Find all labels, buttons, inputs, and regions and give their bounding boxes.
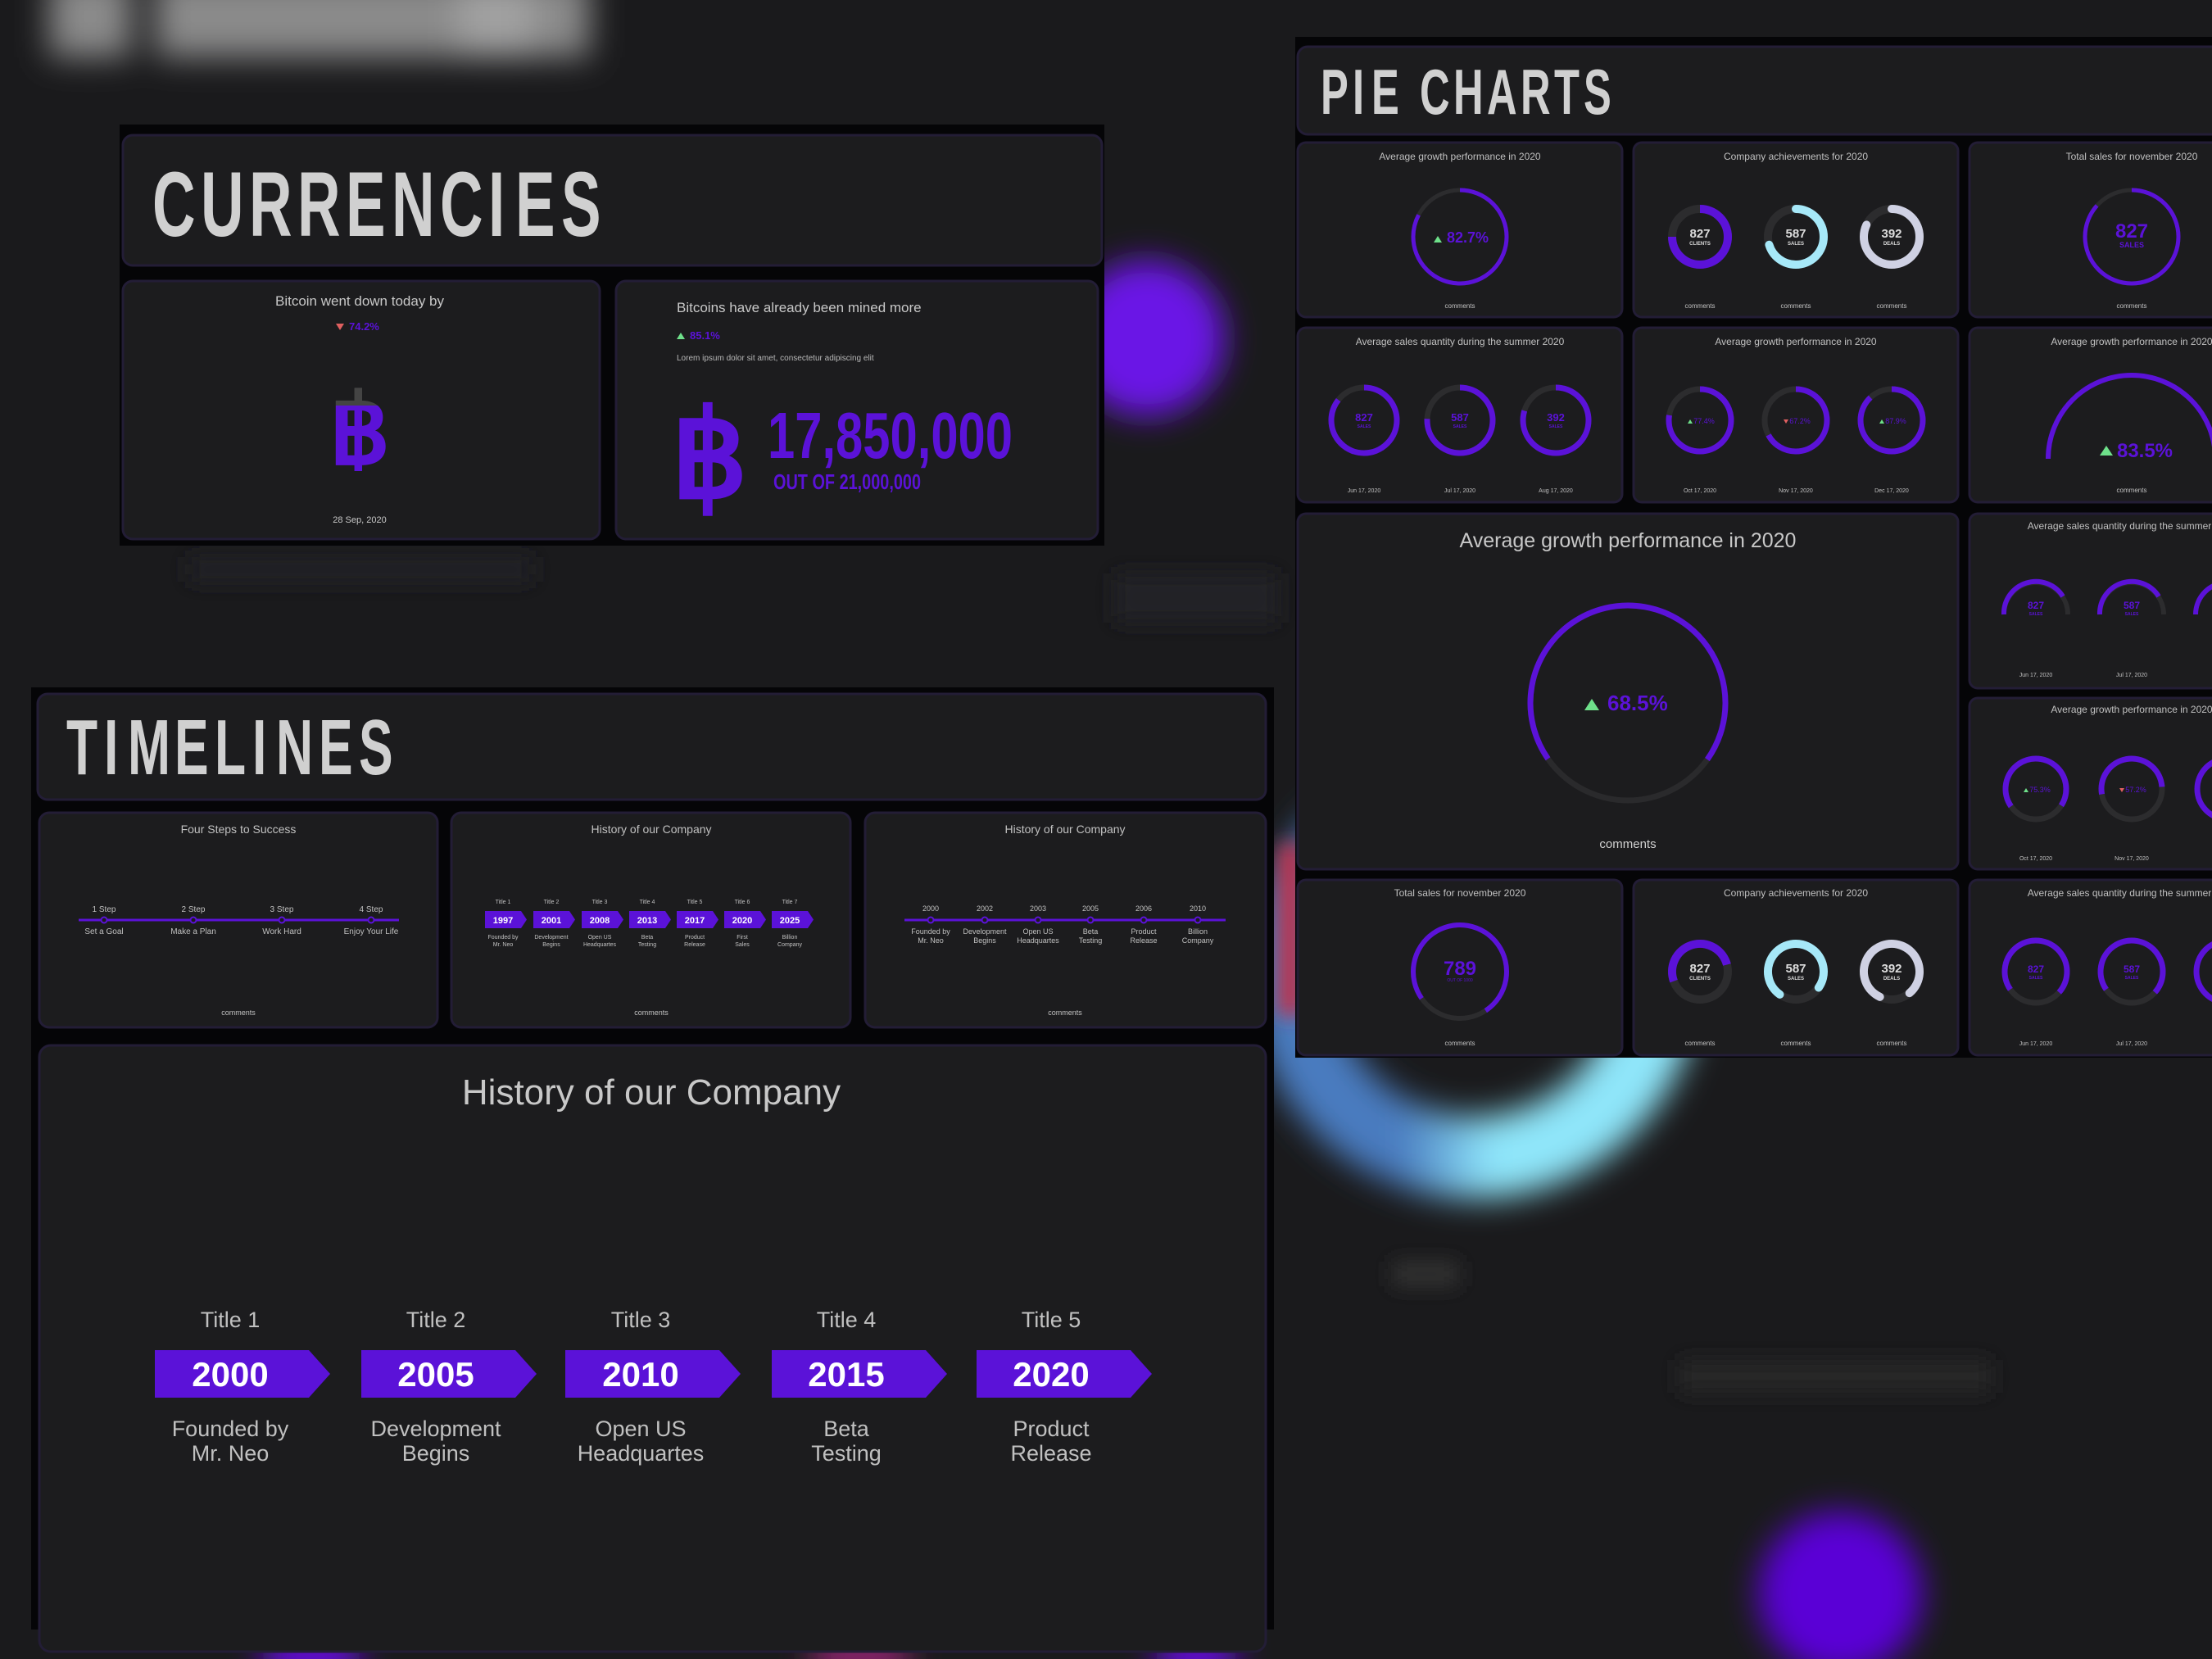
card: history chevrons: History of our Company [591, 823, 712, 836]
card: four steps: Set a Goal [84, 927, 124, 936]
chart: growth three [1669, 336, 1923, 494]
card: bitcoin went down: Bitcoin went down today by [275, 293, 445, 309]
step 1: Founded by [172, 1416, 289, 1441]
chart: big growth 68.5: Average growth performance in 2020 [1460, 529, 1796, 552]
step 2: Title 2 [406, 1308, 465, 1332]
card: history chevrons: Begins [542, 942, 560, 948]
chart: summer sales [1331, 336, 1589, 494]
step 4: 2015 [808, 1355, 885, 1394]
card: bitcoin went down: 28 Sep, 2020 [333, 515, 387, 525]
card: history chevrons: comments [634, 1009, 669, 1017]
chart: company achievements: 392 [1881, 227, 1902, 241]
chart: company achievements: CLIENTS [1689, 242, 1711, 247]
chart: growth three: Oct 17, 2020 [1684, 488, 1716, 494]
chart: summer sales bottom right: Jul 17, 2020 [2116, 1041, 2147, 1047]
chart: summer sales: Average sales quantity during the summer 2020 [1356, 336, 1565, 347]
chart: summer sales: Aug 17, 2020 [1539, 488, 1573, 494]
card: history chevrons: Development [534, 935, 569, 941]
big number: 17,850,000 [768, 399, 1013, 472]
card: bitcoins mined: Bitcoins have already been mined more [677, 300, 922, 315]
card: bitcoins mined: OUT OF 21,000,000 [773, 469, 921, 494]
step 4: Testing [811, 1441, 882, 1466]
chart: summer sales bottom right [1992, 887, 2212, 1047]
card: history line: Beta [1083, 927, 1098, 936]
step 1: 2000 [192, 1355, 269, 1394]
icon: bitcoin partial: ฿ [329, 377, 391, 485]
heading: currencies [123, 135, 1102, 265]
card: history chevrons: Beta [641, 935, 653, 941]
card: history line: 2010 [1190, 904, 1206, 913]
card: history chevrons: 2020 [732, 916, 752, 926]
step 5: Product [1013, 1416, 1090, 1441]
icon: bitcoin partial: ฿ [329, 377, 391, 485]
chart: avg growth 82.7: 82.7% [1447, 229, 1489, 246]
chart: gauge 83.5: Average growth performance in 2020 [2051, 336, 2212, 347]
card: history line: Testing [1079, 936, 1102, 945]
step 4: Beta [823, 1416, 870, 1441]
step 1: Mr. Neo [192, 1441, 269, 1466]
chart: gauge 83.5: comments [2117, 487, 2146, 494]
chart: total sales 789: OUT OF 1000 [1447, 978, 1473, 983]
chart: growth three: Average growth performance in 2020 [1715, 336, 1877, 347]
chart: total sales 827: SALES [2119, 241, 2144, 249]
chart: company achievements gauges: 392 [1881, 962, 1902, 976]
step 2: 2005 [397, 1355, 474, 1394]
card: history chevrons: Mr. Neo [493, 942, 513, 948]
card: four steps: Enjoy Your Life [344, 927, 399, 936]
chart: growth right: 57.2% [2125, 786, 2146, 794]
chart: company achievements: comments [1877, 302, 1906, 310]
chart: summer sales bottom right: 587 [2124, 963, 2140, 975]
card: history chevrons: Title 4 [640, 900, 655, 905]
chart: summer sales: SALES [1453, 424, 1467, 429]
chart: growth right: 75.3% [2029, 786, 2051, 794]
card: history chevrons: 2025 [780, 916, 800, 926]
step 3 [565, 1308, 741, 1466]
card: four steps [39, 813, 437, 1027]
chart: summer sales: SALES [1358, 424, 1371, 429]
chart: summer sales: 827 [1355, 411, 1373, 424]
card: big history timeline [39, 1045, 1266, 1652]
panel: pie charts [1295, 37, 2212, 1058]
card: history chevrons: 2017 [685, 916, 705, 926]
card: history chevrons: Title 7 [782, 900, 798, 905]
card: history line: 2005 [1082, 904, 1099, 913]
card: four steps: Four Steps to Success [181, 823, 296, 836]
step 3: Headquartes [578, 1441, 704, 1466]
card: history chevrons: 2013 [637, 916, 657, 926]
indicator up [677, 329, 720, 342]
chart: growth three: 77.4% [1693, 417, 1715, 425]
step 5 [977, 1308, 1152, 1466]
panel: currencies [120, 125, 1104, 546]
chart: total sales 789 [1394, 887, 1526, 1047]
heading: pie charts: PIECHARTS [1321, 56, 1611, 128]
step 5: 2020 [1013, 1355, 1090, 1394]
card: history line: History of our Company [1004, 823, 1126, 836]
card: history chevrons: First [737, 935, 748, 941]
card: history line: Product [1131, 927, 1157, 936]
card: history chevrons: Founded by [488, 935, 519, 941]
card: history line: Open US [1022, 927, 1054, 936]
indicator down: 74.2% [349, 320, 379, 333]
chart: growth three: 67.2% [1789, 417, 1811, 425]
chart: growth right [1993, 704, 2212, 862]
chart: company achievements: comments [1685, 302, 1715, 310]
step 5: Title 5 [1022, 1308, 1081, 1332]
card: history chevrons: Release [684, 942, 705, 948]
chart: company achievements: Company achievements for 2020 [1724, 151, 1868, 162]
chart: total sales 827: 827 [2115, 220, 2148, 243]
card: history line: Development [963, 927, 1007, 936]
chart: summer sales: Jun 17, 2020 [1348, 488, 1380, 494]
chart: summer sales bottom right: SALES [2125, 976, 2139, 981]
step 2 [361, 1308, 537, 1466]
card: history line: Mr. Neo [918, 936, 944, 945]
step 3: Open US [595, 1416, 687, 1441]
chart: company achievements gauges: SALES [1788, 977, 1804, 981]
chart: company achievements gauges: 587 [1785, 962, 1806, 976]
step 5: Release [1010, 1441, 1092, 1466]
chart: avg growth 82.7: Average growth performance in 2020 [1379, 151, 1541, 162]
card: history chevrons [451, 813, 850, 1027]
chart: company achievements gauges: comments [1685, 1040, 1715, 1047]
card: history line: Founded by [911, 927, 950, 936]
card: history line: 2003 [1030, 904, 1046, 913]
card: four steps: 2 Step [182, 905, 206, 914]
indicator up: 85.1% [690, 329, 720, 342]
icon: bitcoin partial [336, 388, 386, 471]
card: bitcoin went down [123, 281, 600, 539]
chart: company achievements gauges: DEALS [1883, 977, 1900, 981]
chart: summer half rings: Jun 17, 2020 [2019, 673, 2052, 678]
heading: currencies: CURRENCIES [152, 153, 601, 256]
chart: big growth 68.5: 68.5% [1607, 691, 1668, 715]
step 1: Title 1 [201, 1308, 260, 1332]
chart: summer half rings [2004, 520, 2212, 678]
card: history line: Company [1182, 936, 1214, 945]
card: history chevrons: 1997 [493, 916, 513, 926]
card: four steps: 3 Step [270, 905, 294, 914]
card: history chevrons: Title 5 [687, 900, 703, 905]
chart: summer sales bottom right: SALES [2029, 976, 2043, 981]
chart: growth right: Average growth performance in 2020 [2051, 704, 2212, 715]
chart: summer sales bottom right: Jun 17, 2020 [2019, 1041, 2052, 1047]
chart: growth right: Nov 17, 2020 [2115, 856, 2149, 862]
chart: summer half rings: 587 [2124, 600, 2140, 611]
heading: timelines: TIMELINES [66, 705, 393, 791]
card: four steps: comments [221, 1009, 256, 1017]
card: history line: comments [1048, 1009, 1082, 1017]
chart: summer half rings: 827 [2028, 600, 2044, 611]
chart: company achievements: DEALS [1883, 242, 1900, 247]
card: history chevrons: Open US [588, 935, 612, 941]
step 4: Title 4 [817, 1308, 876, 1332]
card: history chevrons: 2008 [590, 916, 610, 926]
card: four steps: 1 Step [93, 905, 116, 914]
chart: growth right: Oct 17, 2020 [2019, 856, 2052, 862]
chart: company achievements: SALES [1788, 242, 1804, 247]
card: history line: 2000 [922, 904, 939, 913]
heading: pie charts [1298, 47, 2212, 134]
chart: avg growth 82.7: comments [1445, 302, 1475, 310]
panel: timelines [31, 687, 1274, 1652]
chart: big growth 68.5: comments [1599, 837, 1657, 851]
card: bitcoins mined: Lorem ipsum dolor sit amet, consectetur adipiscing elit [677, 354, 874, 363]
chart: gauge 83.5 [2048, 336, 2212, 494]
card: four steps: 4 Step [360, 905, 383, 914]
chart: big growth 68.5 [1460, 529, 1796, 851]
card: history chevrons: 2001 [542, 916, 561, 926]
chart: avg growth 82.7 [1379, 151, 1541, 310]
chart: gauge 83.5: 83.5% [2117, 440, 2173, 462]
chart: total sales 789: 789 [1444, 958, 1476, 980]
chart: summer sales: SALES [1549, 424, 1563, 429]
card: history chevrons: Title 6 [735, 900, 750, 905]
card: history chevrons: Headquartes [583, 942, 617, 948]
chart: summer half rings: Jul 17, 2020 [2116, 673, 2147, 678]
card: bitcoins mined [616, 281, 1098, 539]
card: history line: Begins [973, 936, 996, 945]
step 1 [155, 1308, 330, 1466]
step 2: Begins [402, 1441, 469, 1466]
heading: timelines [38, 694, 1266, 800]
chart: growth three: 87.9% [1885, 417, 1906, 425]
card: history line: Headquartes [1017, 936, 1059, 945]
card: history line [865, 813, 1266, 1027]
card: history chevrons: Title 3 [592, 900, 608, 905]
card: history chevrons: Sales [735, 942, 750, 948]
chart: total sales 789: comments [1445, 1040, 1475, 1047]
step 3: Title 3 [611, 1308, 670, 1332]
chart: total sales 827 [2066, 151, 2198, 310]
card: history chevrons: Product [685, 935, 705, 941]
indicator down [336, 320, 379, 333]
chart: company achievements gauges: comments [1877, 1040, 1906, 1047]
chart: summer sales bottom right: 827 [2028, 963, 2044, 975]
card: history chevrons: Title 1 [496, 900, 511, 905]
chart: summer half rings: SALES [2029, 612, 2043, 617]
card: history line: Billion [1188, 927, 1208, 936]
card: history chevrons: Billion [782, 935, 797, 941]
chart: company achievements [1672, 151, 1920, 310]
chart: company achievements: 827 [1689, 227, 1711, 241]
chart: summer sales: 587 [1451, 411, 1469, 424]
card: history chevrons: Testing [638, 942, 656, 948]
chart: summer sales: 392 [1547, 411, 1565, 424]
chart: total sales 827: Total sales for november 2020 [2066, 151, 2198, 162]
chart: summer half rings: SALES [2125, 612, 2139, 617]
chart: company achievements: comments [1781, 302, 1811, 310]
card: history chevrons: Company [777, 942, 802, 948]
chart: total sales 827: comments [2117, 302, 2146, 310]
card: history chevrons: Title 2 [544, 900, 560, 905]
chart: growth three: Nov 17, 2020 [1779, 488, 1813, 494]
step 3: 2010 [602, 1355, 679, 1394]
chart: company achievements gauges: CLIENTS [1689, 977, 1711, 981]
chart: company achievements gauges: comments [1781, 1040, 1811, 1047]
chart: company achievements: 587 [1785, 227, 1806, 241]
card: four steps: Make a Plan [170, 927, 216, 936]
chart: growth three: Dec 17, 2020 [1874, 488, 1909, 494]
chart: company achievements gauges: Company achievements for 2020 [1724, 887, 1868, 899]
card: history line: 2002 [977, 904, 993, 913]
chart: summer sales: Jul 17, 2020 [1444, 488, 1475, 494]
card: history line: 2006 [1135, 904, 1152, 913]
card: big history timeline: History of our Company [462, 1072, 841, 1113]
icon: bitcoin: ฿ [671, 388, 748, 524]
chart: company achievements gauges [1664, 887, 1929, 1047]
step 4 [772, 1308, 947, 1466]
step 2: Development [370, 1416, 501, 1441]
card: four steps: Work Hard [262, 927, 301, 936]
card: history line: Release [1130, 936, 1158, 945]
chart: total sales 789: Total sales for november 2020 [1394, 887, 1526, 899]
chart: company achievements gauges: 827 [1689, 962, 1711, 976]
